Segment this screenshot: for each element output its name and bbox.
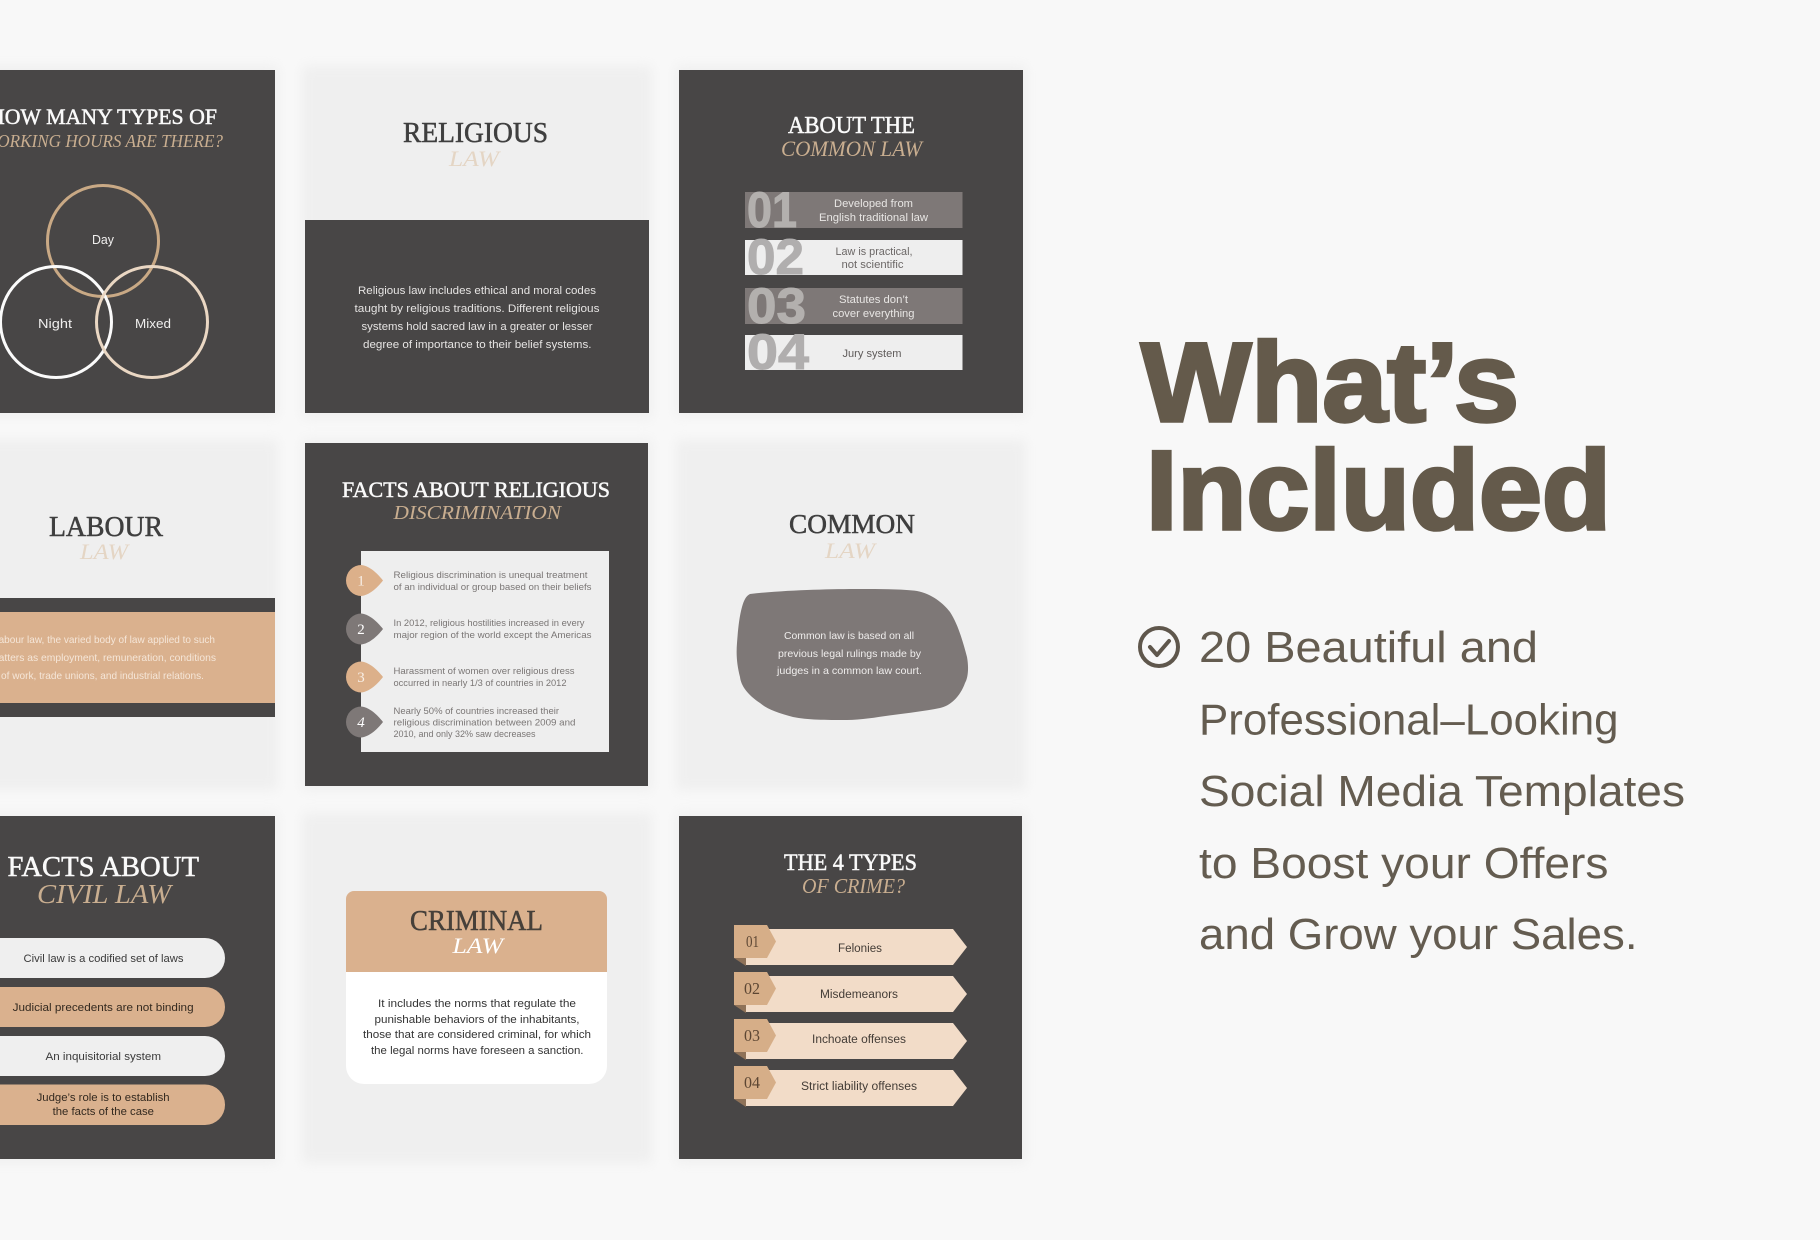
panel: criminal law bbox=[346, 891, 607, 1084]
body text: of work, trade unions, and industrial relations. bbox=[1, 670, 204, 682]
arrow row 02: 02 bbox=[744, 979, 760, 998]
fact text: religious discrimination between 2009 and bbox=[394, 718, 576, 728]
marker 3 bbox=[346, 662, 383, 692]
panel: common law bbox=[737, 509, 968, 720]
marker 2 bbox=[346, 614, 383, 644]
row 02: not scientific bbox=[842, 259, 904, 271]
pill 4: the facts of the case bbox=[53, 1106, 154, 1118]
arrow row 01: 01 bbox=[746, 932, 759, 951]
fact text: 2010, and only 32% saw decreases bbox=[394, 729, 536, 740]
row 01 bbox=[745, 182, 962, 238]
subheading: of crime: OF CRIME? bbox=[802, 874, 905, 898]
row 04: Jury system bbox=[842, 348, 902, 360]
row 04 bbox=[745, 324, 962, 380]
heading: facts about religious: FACTS ABOUT RELIGIOUS bbox=[342, 477, 610, 502]
body text: taught by religious traditions. Different religious bbox=[354, 303, 600, 315]
body text bbox=[0, 634, 216, 682]
row 03: 03 bbox=[747, 278, 806, 334]
body text bbox=[363, 998, 591, 1057]
row 03: cover everything bbox=[832, 308, 914, 320]
subheading: law: LAW bbox=[79, 539, 130, 564]
arrow row 03: Inchoate offenses bbox=[812, 1034, 906, 1046]
tan band bbox=[0, 612, 275, 703]
title: Included bbox=[1146, 428, 1611, 553]
heading: criminal: CRIMINAL bbox=[410, 906, 543, 937]
pill 4: Judge’s role is to establish bbox=[37, 1092, 170, 1104]
icon: check circle bbox=[1140, 628, 1178, 666]
pill 4 bbox=[0, 1084, 225, 1125]
venn labels: Night bbox=[38, 316, 72, 331]
arrow row 04: Strict liability offenses bbox=[801, 1081, 917, 1093]
fact text: In 2012, religious hostilities increased in every bbox=[394, 618, 585, 629]
venn labels bbox=[38, 232, 171, 331]
tan header bbox=[346, 891, 607, 972]
subheading: law: LAW bbox=[448, 146, 501, 171]
arrow row 03 bbox=[734, 1019, 967, 1060]
pill 1: Civil law is a codified set of laws bbox=[24, 953, 184, 965]
body text bbox=[354, 285, 600, 351]
marker 1 bbox=[346, 565, 383, 596]
white card bbox=[346, 891, 607, 1084]
panel: religious law bbox=[305, 118, 649, 413]
subheading: common law: COMMON LAW bbox=[781, 136, 924, 161]
row 02 bbox=[745, 229, 962, 285]
row 02: 02 bbox=[747, 229, 804, 285]
row 03: Statutes don’t bbox=[839, 294, 908, 306]
subheading: law: LAW bbox=[824, 538, 877, 563]
marker 4 bbox=[346, 706, 383, 738]
venn labels: Day bbox=[92, 232, 114, 247]
venn labels: Mixed bbox=[135, 316, 171, 331]
heading: the 4 types: THE 4 TYPES bbox=[784, 850, 917, 875]
subheading: law: LAW bbox=[451, 933, 505, 958]
venn diagram bbox=[0, 186, 208, 378]
marker 1: 1 bbox=[357, 574, 365, 590]
body text: degree of importance to their belief systems. bbox=[363, 339, 592, 351]
body text: It includes the norms that regulate the bbox=[378, 998, 576, 1010]
feature description text: 20 Beautiful and bbox=[1199, 623, 1538, 672]
body text: Religious law includes ethical and moral codes bbox=[358, 285, 597, 297]
panel: facts about religious discrimination bbox=[305, 443, 648, 786]
body text: systems hold sacred law in a greater or lesser bbox=[362, 321, 593, 333]
arrow row 03: 03 bbox=[744, 1026, 760, 1045]
arrow row 04 bbox=[734, 1066, 967, 1107]
row 02: Law is practical, bbox=[836, 246, 912, 258]
panel: working hours venn bbox=[0, 70, 275, 413]
title bbox=[1141, 320, 1611, 553]
arrow row 04: 04 bbox=[744, 1073, 760, 1092]
arrow row 02: Misdemeanors bbox=[820, 989, 898, 1001]
panel: about the common law bbox=[679, 70, 1023, 413]
body text: the legal norms have foreseen a sanction. bbox=[371, 1045, 584, 1057]
dark band bbox=[0, 598, 275, 717]
dark text block bbox=[305, 220, 649, 413]
heading: common: COMMON bbox=[789, 509, 915, 539]
feature description text: to Boost your Offers bbox=[1199, 839, 1608, 888]
row 01: English traditional law bbox=[819, 212, 928, 224]
pill 2 bbox=[0, 987, 225, 1027]
heading: labour: LABOUR bbox=[49, 512, 163, 543]
row 01: 01 bbox=[747, 182, 797, 238]
title: What’s bbox=[1141, 320, 1519, 445]
body text: previous legal rulings made by bbox=[778, 648, 922, 660]
blob shape bbox=[737, 589, 968, 720]
pill 3: An inquisitorial system bbox=[46, 1051, 161, 1063]
body text: Common law is based on all bbox=[784, 630, 914, 642]
heading: religious: RELIGIOUS bbox=[403, 118, 548, 149]
marker 4: 4 bbox=[357, 715, 365, 731]
pill 2: Judicial precedents are not binding bbox=[13, 1002, 194, 1014]
subheading: discrimination: DISCRIMINATION bbox=[392, 502, 563, 524]
fact text: of an individual or group based on their beliefs bbox=[394, 582, 592, 593]
fact text: Harassment of women over religious dress bbox=[394, 666, 575, 677]
feature description text: and Grow your Sales. bbox=[1199, 910, 1638, 959]
arrow row 01: Felonies bbox=[838, 943, 882, 955]
panel: facts about civil law bbox=[0, 816, 275, 1159]
body text bbox=[776, 630, 922, 677]
pill 1 bbox=[0, 938, 225, 978]
body text: punishable behaviors of the inhabitants, bbox=[374, 1014, 580, 1026]
body text: judges in a common law court. bbox=[776, 665, 922, 677]
feature description text: Social Media Templates bbox=[1199, 767, 1685, 816]
arrow row 02 bbox=[734, 972, 967, 1013]
row 03 bbox=[745, 278, 962, 334]
white content box bbox=[361, 551, 609, 752]
fact text bbox=[394, 570, 592, 740]
heading: about the: ABOUT THE bbox=[788, 113, 915, 139]
fact text: Religious discrimination is unequal treatment bbox=[394, 570, 588, 581]
arrow row 01 bbox=[734, 925, 967, 966]
marker 2: 2 bbox=[357, 622, 365, 638]
marker 3: 3 bbox=[357, 670, 365, 686]
pill 3 bbox=[0, 1036, 225, 1076]
subheading: civil law: CIVIL LAW bbox=[37, 879, 174, 909]
fact text: Nearly 50% of countries increased their bbox=[394, 706, 559, 717]
heading: facts about: FACTS ABOUT bbox=[8, 852, 199, 883]
feature description text bbox=[1199, 623, 1685, 959]
row 04: 04 bbox=[747, 324, 809, 380]
row 01: Developed from bbox=[834, 198, 913, 210]
feature description text: Professional–Looking bbox=[1199, 696, 1618, 744]
panel: four types of crime bbox=[679, 816, 1022, 1159]
body text: those that are considered criminal, for which bbox=[363, 1029, 591, 1041]
fact text: major region of the world except the Americas bbox=[394, 630, 592, 641]
fact text: occurred in nearly 1/3 of countries in 2012 bbox=[394, 678, 566, 689]
panel: labour law bbox=[0, 512, 275, 717]
